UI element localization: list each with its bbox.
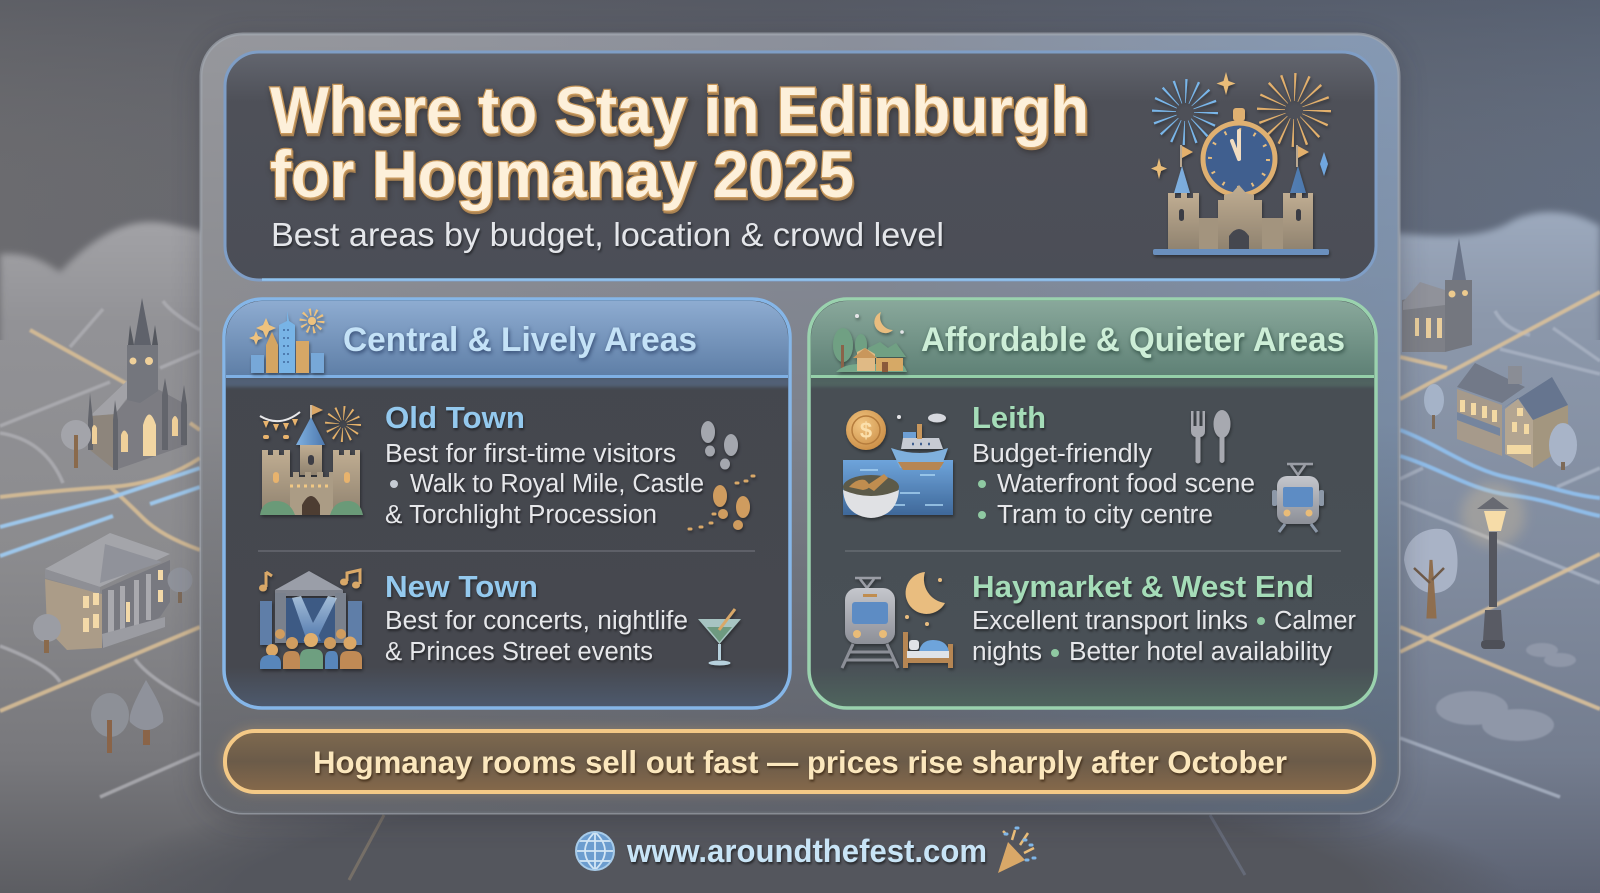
right hills and ground: [1340, 212, 1600, 893]
heading: central and lively areas: Central & Lively Areas: [343, 321, 697, 359]
icon: concert stage and crowd: [259, 570, 362, 669]
bottom faint paths: [349, 815, 1245, 880]
map roads: left: [0, 301, 200, 797]
text: leith: Budget-friendly: [972, 440, 1152, 468]
text: old town: Best for first-time visitors: [385, 440, 676, 468]
icon: train, moon and bed: [842, 572, 953, 668]
icon: footprints: [689, 421, 754, 530]
snow rocks: [1436, 643, 1576, 741]
area: haymarket and west end: [842, 569, 1356, 668]
icon: coin, boat and bowl: $: [860, 418, 872, 443]
icon: castle with bunting: [260, 405, 363, 515]
panel: central and lively areas: [224, 299, 790, 708]
area: new town: [259, 569, 741, 669]
callout: rooms sell out fast: Hogmanay rooms sell out fast — prices rise sharply after October: [313, 744, 1287, 780]
title: Where to Stay in Edinburgh: [270, 73, 1089, 147]
text: haymarket and west end: Calmer: [1274, 607, 1356, 635]
icon: coin, boat and bowl: [843, 410, 953, 518]
icon: globe: [576, 832, 614, 870]
icon: martini glass: [698, 609, 741, 666]
text: haymarket and west end: Better hotel availability: [1069, 638, 1332, 666]
text: old town: Walk to Royal Mile, Castle: [410, 470, 704, 498]
icon: clock, castle and fireworks: [1151, 72, 1329, 255]
subtitle: Best areas by budget, location & crowd level: [271, 216, 944, 253]
right houses: [1424, 363, 1577, 470]
callout: rooms sell out fast: [223, 729, 1376, 793]
header panel: [225, 52, 1376, 280]
left church: [61, 298, 187, 470]
street lamp: [1461, 483, 1525, 649]
icon: tram: [1272, 464, 1324, 532]
text: haymarket and west end: nights: [972, 638, 1042, 666]
left lower trees: [91, 680, 163, 753]
right church: [1402, 238, 1472, 352]
icon: party popper: [998, 828, 1035, 873]
text: haymarket and west end: Excellent transport links: [972, 607, 1248, 635]
title: for Hogmanay 2025: [270, 137, 854, 211]
icon: city skyline: [249, 311, 324, 373]
left hills and ground: [0, 222, 260, 893]
website url: www.aroundthefest.com: [626, 833, 987, 869]
panel: affordable and quieter areas: [809, 299, 1376, 708]
left classical building: [33, 533, 192, 653]
outer glass panel: [201, 34, 1399, 819]
icon: fork and spoon: [1191, 410, 1230, 464]
text: new town: New Town: [385, 569, 538, 604]
footer: website link: [576, 828, 1035, 873]
text: leith: Tram to city centre: [997, 501, 1213, 529]
text: haymarket and west end: Haymarket & West End: [972, 569, 1314, 604]
text: old town: [385, 400, 704, 529]
area: leith: [843, 400, 1324, 532]
text: leith: Leith: [972, 400, 1046, 435]
map roads: right: [1400, 292, 1600, 797]
title: [270, 73, 1089, 211]
area: old town: [260, 400, 754, 530]
text: old town: & Torchlight Procession: [385, 501, 657, 529]
heading: affordable and quieter areas: Affordable & Quieter Areas: [921, 321, 1345, 359]
icon: house, trees and moon: [833, 312, 907, 372]
text: leith: Waterfront food scene: [997, 470, 1255, 498]
text: new town: [385, 569, 688, 666]
text: new town: & Princes Street events: [385, 638, 653, 666]
right tree: [1404, 529, 1458, 617]
text: new town: Best for concerts, nightlife: [385, 607, 688, 635]
text: leith: [972, 400, 1255, 529]
text: haymarket and west end: [972, 569, 1356, 666]
text: old town: Old Town: [385, 400, 525, 435]
